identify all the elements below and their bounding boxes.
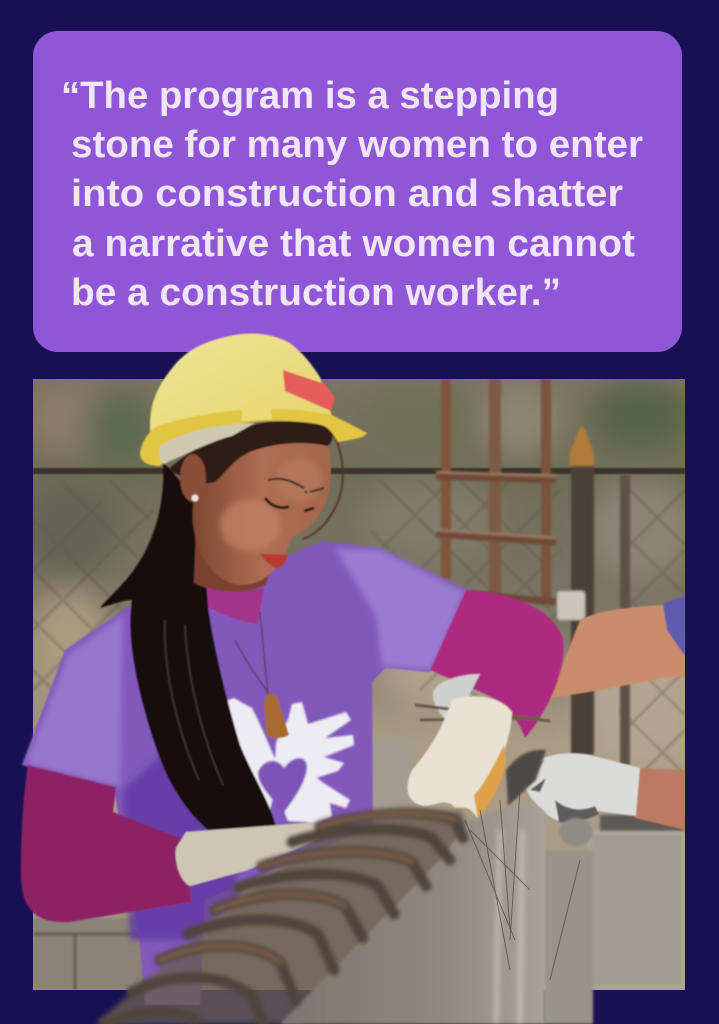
quote text: “The program is a stepping — [61, 75, 559, 117]
wall side panel — [544, 850, 593, 1024]
right worker glove — [522, 753, 640, 823]
earring — [192, 494, 198, 502]
right worker arm top — [550, 596, 685, 698]
woman — [21, 333, 640, 1005]
ear — [180, 454, 206, 502]
left hand glove — [176, 822, 322, 886]
hair strand — [303, 433, 343, 539]
hair top — [170, 421, 333, 483]
necklace pendant — [235, 612, 289, 738]
centre glove and cuff — [407, 696, 512, 820]
torso: purple t-shirt — [22, 541, 468, 1005]
print: heart — [258, 758, 307, 814]
lips — [260, 554, 288, 568]
quote text: a narrative that women cannot — [72, 223, 635, 265]
rebar knot at gloves — [506, 750, 546, 806]
tie wires — [465, 790, 580, 980]
face — [193, 442, 331, 585]
hard hat — [140, 333, 367, 466]
hat inner strap — [159, 423, 255, 464]
shirt print: hands and heart — [226, 698, 354, 823]
chain-link fence — [33, 480, 685, 790]
panel: quote — [33, 31, 682, 352]
hat dome — [150, 333, 333, 440]
magenta collar — [198, 584, 264, 624]
print: right hand — [274, 702, 354, 783]
hair — [100, 462, 276, 830]
back glove — [433, 674, 480, 720]
right worker arm bottom — [635, 768, 685, 830]
rebar column — [436, 379, 556, 604]
hat brim — [140, 409, 367, 466]
hair strands — [165, 620, 223, 785]
long sleeve right — [430, 590, 564, 738]
print: lower hand — [280, 770, 350, 823]
neck — [194, 525, 274, 592]
wall main — [280, 800, 545, 1024]
long sleeve left — [21, 765, 191, 922]
photo background: site with fence — [20, 379, 700, 990]
blurred rebar cage — [105, 813, 463, 1024]
quote text — [61, 75, 643, 314]
fence top rail — [33, 468, 685, 474]
fence post — [557, 426, 630, 765]
helmet red sticker — [283, 370, 335, 411]
quote text: into construction and shatter — [71, 173, 623, 215]
foreground wall with rebar — [95, 750, 593, 1024]
print: left hand — [226, 698, 280, 810]
quote text: stone for many women to enter — [71, 124, 643, 166]
quote text: be a construction worker.” — [71, 272, 561, 314]
background blocks — [33, 738, 685, 990]
eyes and brows — [265, 479, 324, 511]
hat clip — [242, 403, 272, 421]
rust rods — [415, 705, 550, 721]
cage backdrop — [95, 810, 470, 1024]
